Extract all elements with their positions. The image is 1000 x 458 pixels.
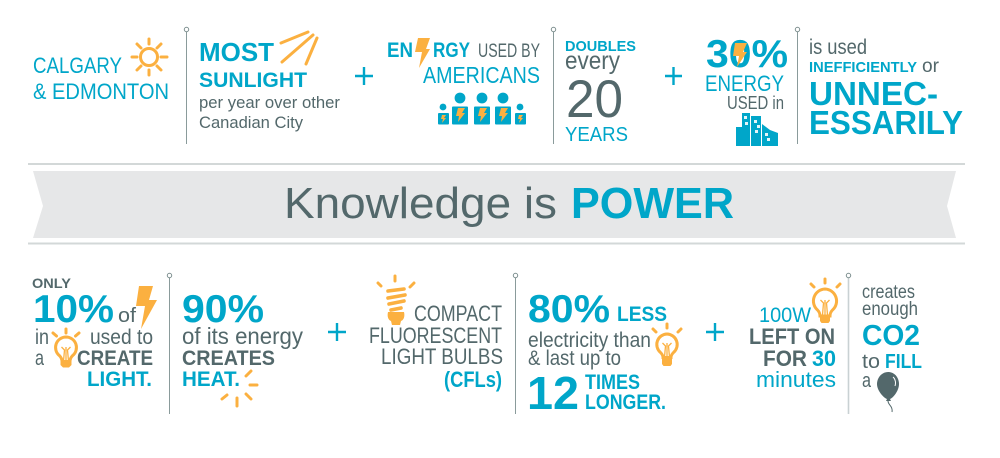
text: 100W left on: 100W — [759, 304, 811, 327]
icon: plus — [355, 67, 373, 85]
text: creates enough CO2: to — [862, 351, 880, 373]
divider pin — [846, 273, 851, 414]
text: 80% less, 12 times longer: & last up to — [528, 347, 621, 370]
text: CFL name: COMPACT — [414, 301, 502, 326]
text: only 10%: CREATE — [77, 347, 153, 370]
text: 80% less, 12 times longer: 80% — [528, 288, 610, 331]
text: only 10%: ONLY — [32, 275, 72, 291]
text: only 10%: of — [118, 305, 136, 327]
text: energy used by Americans: RGY — [433, 39, 470, 62]
text: 80% less, 12 times longer: 12 — [527, 367, 579, 419]
text: 30% energy used in: ENERGY — [705, 71, 784, 96]
text: only 10%: used to — [90, 326, 153, 349]
panel: Calgary and Edmonton sunlight — [33, 27, 340, 144]
panel: 10% used to create light — [32, 273, 303, 414]
text: energy used by Americans — [387, 39, 540, 88]
text: only 10%: a — [35, 347, 44, 370]
text: 90% creates heat: 90% — [182, 288, 264, 331]
text: energy used by Americans: EN — [387, 39, 413, 62]
text: Calgary & Edmonton — [33, 53, 169, 104]
text: Calgary & Edmonton: CALGARY — [33, 53, 122, 78]
text: CFL name: (CFLs) — [444, 367, 502, 392]
text: CFL name — [369, 301, 503, 392]
icon: plus — [328, 323, 346, 341]
text: 90% creates heat: CREATES — [182, 347, 275, 370]
icon: CFL bulb — [378, 276, 414, 325]
text: used inefficiently or unnecessarily — [809, 36, 963, 141]
text: used inefficiently or unnecessarily: ESSARILY — [809, 104, 963, 141]
text: 80% less, 12 times longer — [527, 288, 667, 419]
text: 80% less, 12 times longer: electricity than — [528, 329, 651, 352]
text: creates enough CO2: FILL — [885, 351, 922, 373]
icon: light bulb — [53, 329, 79, 368]
text: 100W left on: FOR — [763, 346, 807, 371]
text: 80% less, 12 times longer: TIMES — [585, 371, 640, 394]
text: 100W left on — [749, 304, 836, 392]
text: energy used by Americans: AMERICANS — [423, 62, 540, 88]
text: most sunlight — [199, 37, 340, 132]
text: creates enough CO2 — [862, 282, 922, 392]
title: Knowledge is — [284, 179, 557, 228]
text: 100W left on: 30 — [812, 346, 836, 371]
text: creates enough CO2: a — [862, 370, 872, 392]
icon: light bulb — [811, 279, 840, 323]
text: 80% less, 12 times longer: LONGER. — [585, 391, 666, 414]
text: used inefficiently or unnecessarily: UNNEC- — [809, 75, 938, 112]
divider pin — [551, 27, 556, 144]
divider pin — [513, 273, 518, 414]
icon: balloon — [877, 372, 899, 412]
text: CFL name: LIGHT BULBS — [381, 344, 503, 369]
text: most sunlight: per year over other — [199, 93, 340, 112]
panel: energy used by Americans — [387, 27, 636, 146]
text: CFL name: FLUORESCENT — [369, 323, 502, 348]
text: most sunlight: Canadian City — [199, 113, 303, 132]
divider pin — [795, 27, 800, 144]
text: 90% creates heat: of its energy — [182, 323, 303, 349]
text: energy used by Americans: USED BY — [478, 41, 540, 62]
icon: people with bolts — [438, 93, 526, 124]
text: doubles every 20 years: DOUBLES — [565, 38, 636, 55]
icon: light bulb — [653, 324, 681, 366]
text: only 10%: in — [35, 326, 49, 349]
text: 100W left on: LEFT ON — [749, 324, 835, 349]
text: Calgary & Edmonton: & EDMONTON — [33, 79, 169, 104]
ribbon — [33, 171, 956, 238]
icon: plus — [665, 67, 682, 85]
text: doubles every 20 years: 20 — [566, 70, 623, 129]
icon: heat rays — [222, 371, 257, 406]
text: doubles every 20 years: every — [565, 47, 620, 75]
text: 90% creates heat: HEAT. — [182, 368, 240, 391]
text: 100W left on: minutes — [756, 367, 836, 392]
divider pin — [184, 27, 189, 144]
icon: sun rays — [281, 32, 317, 64]
divider pin — [167, 273, 172, 414]
text: used inefficiently or unnecessarily: or — [922, 56, 940, 77]
text: doubles every 20 years — [565, 38, 636, 146]
icon: lightning bolt — [136, 286, 157, 329]
panel: 100W creates CO2 — [749, 273, 922, 414]
text: creates enough CO2: CO2 — [862, 320, 920, 352]
text: creates enough CO2: creates — [862, 282, 915, 303]
text: 30% energy used in: USED in — [727, 93, 784, 113]
title emphasis: POWER — [571, 179, 734, 228]
text: used inefficiently or unnecessarily: INEFFICIENTLY — [809, 59, 917, 76]
text: 90% creates heat — [182, 288, 303, 391]
panel: compact fluorescent light bulbs — [369, 273, 681, 419]
text: 80% less, 12 times longer: LESS — [617, 303, 667, 326]
text: 30% energy used in: 30% — [706, 33, 788, 76]
icon: sun — [132, 39, 167, 75]
text: most sunlight: SUNLIGHT — [199, 69, 307, 92]
text: only 10%: LIGHT. — [87, 368, 152, 391]
icon: lightning bolt in energy — [415, 38, 430, 68]
text: creates enough CO2: enough — [862, 299, 918, 320]
text: only 10%: 10% — [33, 288, 114, 331]
text: only 10% — [32, 275, 153, 391]
text: 30% energy used in — [705, 33, 788, 113]
panel: 30% energy used in buildings — [705, 27, 963, 146]
icon: bolt in zero — [733, 43, 747, 67]
text: most sunlight: MOST — [199, 37, 274, 67]
text: doubles every 20 years: YEARS — [565, 124, 628, 146]
icon: plus — [706, 323, 724, 341]
title banner — [28, 164, 965, 244]
text: used inefficiently or unnecessarily: is used — [809, 36, 867, 59]
icon: buildings — [736, 113, 778, 146]
